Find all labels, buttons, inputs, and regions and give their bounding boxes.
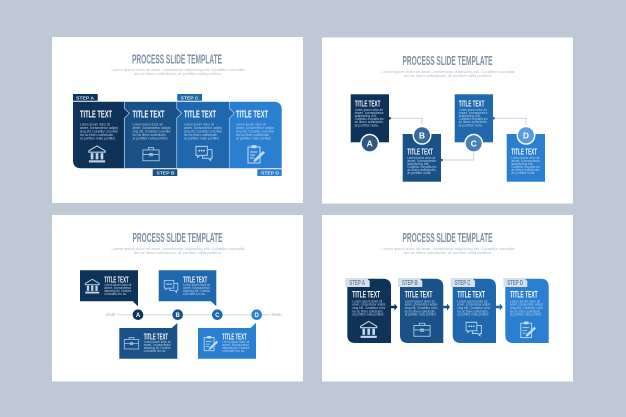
step card B: leo ac libero sollicitudin, (405, 309, 436, 313)
card C: adipiscing elit. (459, 114, 481, 118)
callout B: convallis leo ac (144, 349, 166, 353)
step card C: leo ac libero sollicitudin, (457, 309, 488, 313)
start label: START (106, 313, 116, 317)
callout D: amet, consectetur (222, 343, 250, 347)
marker D: D (255, 313, 260, 319)
step card B: amet, consectetur adipis (405, 303, 438, 307)
tag: step C: STEP C (455, 280, 470, 287)
card A (351, 94, 389, 142)
callout C: Lorem ipsum dolor sit (183, 283, 210, 287)
step A card: TITLE TEXT (80, 109, 112, 120)
badge A (360, 134, 379, 153)
subtitle: leo ac libero sollicitudin, at porttitor nulla porttitor. (404, 73, 492, 78)
step C card (177, 102, 234, 168)
step card B: cing elit. Curabitur conv (405, 306, 438, 310)
callout A: adipiscing elit. Curabitur (104, 289, 132, 293)
heading: PROCESS SLIDE TEMPLATE (132, 231, 222, 245)
step card B: at porttitor nulla porttitor. (405, 313, 437, 317)
step A card: cing elit. Curabitur convallis (80, 130, 118, 134)
card C (455, 94, 493, 142)
connector A to B (388, 117, 422, 125)
step card B: Lorem ipsum dolor sit (405, 299, 435, 303)
subtitle: Lorem ipsum dolor sit amet, consectetur adipiscing elit. Curabitur convallis (382, 246, 514, 251)
card A: amet, consectetur (355, 111, 385, 115)
callout A: TITLE TEXT (104, 275, 129, 284)
callout B: adipiscing elit. Curabitur (144, 346, 171, 350)
callout C: TITLE TEXT (183, 275, 207, 284)
step A card: Lorem ipsum dolor sit (80, 122, 110, 126)
subtitle: Lorem ipsum dolor sit amet, consectetur adipiscing elit. Curabitur convallis (112, 246, 244, 251)
heading: PROCESS SLIDE TEMPLATE (402, 54, 492, 68)
step C card: Lorem ipsum dolor sit (184, 122, 214, 126)
step card C: at porttitor nulla porttitor. (457, 313, 490, 317)
step card D: TITLE TEXT (510, 290, 538, 300)
step C card: at porttitor nulla porttitor. (184, 136, 220, 140)
card B: amet, consectetur (407, 159, 437, 163)
marker A: A (136, 313, 141, 319)
tag: step C (451, 278, 475, 287)
panel: chevron process slide (52, 37, 303, 203)
callout D: Lorem ipsum dolor sit (222, 340, 249, 344)
card C: at porttitor nulla. (459, 123, 483, 127)
card C: amet, consectetur (459, 111, 489, 115)
step card A: Lorem ipsum dolor sit (352, 299, 382, 303)
step C card: amet, consectetur adipis (184, 126, 222, 130)
step card A: cing elit. Curabitur conv (352, 306, 386, 310)
step C card: TITLE TEXT (184, 109, 216, 120)
step card B: TITLE TEXT (405, 290, 433, 300)
callout C: amet, consectetur (183, 286, 211, 290)
card D: ac libero sollicitudin, (511, 168, 540, 172)
card B: at porttitor nulla. (407, 171, 431, 175)
callout C: adipiscing elit. Curabitur (183, 289, 211, 293)
tag: step B (398, 278, 422, 287)
card C: Curabitur convallis leo (459, 117, 488, 121)
callout C (159, 270, 216, 306)
badge C: C (471, 138, 477, 148)
step card A: TITLE TEXT (352, 290, 380, 300)
callout A (80, 270, 138, 306)
panel: timeline slide (52, 215, 303, 382)
tag: step A (345, 278, 370, 287)
step B card: cing elit. Curabitur convallis (132, 130, 171, 134)
callout D: adipiscing elit. Curabitur (222, 346, 250, 350)
finish label: FINISH (272, 313, 282, 317)
subtitle: Lorem ipsum dolor sit amet, consectetur adipiscing elit. Curabitur convallis (112, 67, 244, 72)
card A: at porttitor nulla. (355, 123, 379, 127)
card D: amet, consectetur (511, 159, 541, 163)
card A: adipiscing elit. (355, 114, 377, 118)
step C card: leo ac libero sollicitudin, (184, 133, 218, 137)
card B: ac libero sollicitudin, (407, 168, 436, 172)
step D card: amet, consectetur adipis (236, 126, 274, 130)
step card A: leo ac libero sollicitudin, (352, 309, 383, 313)
heading: PROCESS SLIDE TEMPLATE (132, 52, 222, 66)
marker C (212, 309, 223, 320)
badge B: B (419, 130, 425, 140)
card B (403, 134, 441, 182)
subtitle: leo ac libero sollicitudin, at porttitor nulla porttitor. (404, 250, 492, 255)
panel: staggered cards slide (322, 38, 573, 204)
callout B: amet, consectetur (144, 343, 172, 347)
tag: step A (73, 94, 98, 101)
subtitle: leo ac libero sollicitudin, at porttitor nulla porttitor. (134, 250, 222, 255)
step D card: TITLE TEXT (236, 109, 268, 120)
badge D (516, 126, 536, 145)
arrow A to B (391, 304, 398, 310)
callout C: convallis leo ac (183, 292, 205, 296)
arrow C to D (496, 304, 503, 310)
subtitle: Lorem ipsum dolor sit amet, consectetur adipiscing elit. Curabitur convallis (382, 69, 514, 74)
heading: PROCESS SLIDE TEMPLATE (402, 231, 492, 245)
tag: step C: STEP C (180, 95, 199, 100)
marker A (133, 309, 143, 320)
step A card: amet, consectetur adipis (80, 126, 118, 130)
step B card (124, 102, 182, 168)
tag: step C (177, 94, 202, 101)
callout A: convallis leo ac (104, 292, 127, 296)
step card A (347, 279, 391, 343)
card A: Lorem ipsum dolor sit (355, 108, 383, 112)
tag: step B: STEP B (402, 280, 418, 287)
step card D: Lorem ipsum dolor sit (510, 299, 540, 303)
tag: step B: STEP B (156, 171, 175, 176)
card D: at porttitor nulla. (511, 171, 535, 175)
step card C: TITLE TEXT (457, 290, 485, 300)
callout A: amet, consectetur (104, 286, 132, 290)
step card C: cing elit. Curabitur conv (457, 306, 491, 310)
step card C (453, 279, 496, 343)
card B: adipiscing elit. (407, 162, 429, 166)
step A card: at porttitor nulla porttitor. (80, 136, 116, 140)
tag: step D: STEP D (507, 280, 523, 287)
marker C: C (215, 313, 220, 319)
step B card: Lorem ipsum dolor sit (132, 122, 163, 126)
step B card: at porttitor nulla porttitor. (132, 136, 169, 140)
step D card: Lorem ipsum dolor sit (236, 122, 266, 126)
step C card: cing elit. Curabitur convallis (184, 130, 222, 134)
card C: ac libero sollicitudin, (459, 120, 488, 124)
tag: step A: STEP A (349, 280, 365, 287)
step card D: amet, consectetur adipis (510, 303, 543, 307)
tag: step A: STEP A (76, 95, 95, 100)
subtitle (112, 67, 244, 76)
card A: TITLE TEXT (355, 98, 381, 108)
step card D: at porttitor nulla porttitor. (510, 313, 542, 317)
card D: Curabitur convallis leo (511, 165, 541, 169)
step A card: leo ac libero sollicitudin, (80, 133, 114, 137)
callout D: convallis leo ac (222, 349, 245, 353)
tag: step B (153, 169, 177, 176)
callout B (119, 323, 177, 359)
step card A: amet, consectetur adipis (352, 303, 386, 307)
step card A: at porttitor nulla porttitor. (352, 313, 385, 317)
badge C (464, 134, 483, 153)
step card C: Lorem ipsum dolor sit (457, 299, 487, 303)
connector B to C (440, 153, 474, 161)
step card C: amet, consectetur adipis (457, 303, 491, 307)
card B: Lorem ipsum dolor sit (407, 156, 435, 160)
marker B (172, 309, 183, 320)
step card D (505, 279, 549, 343)
badge D: D (523, 130, 529, 140)
tag: step D: STEP D (261, 171, 280, 176)
step B card: amet, consectetur adipis (132, 126, 171, 130)
card C: TITLE TEXT (459, 98, 485, 108)
card B: Curabitur convallis leo (407, 165, 437, 169)
badge B (412, 126, 432, 145)
step D card (229, 102, 282, 168)
step D card: cing elit. Curabitur convallis (236, 130, 274, 134)
subtitle (382, 69, 514, 78)
step card D: cing elit. Curabitur conv (510, 306, 543, 310)
marker D (251, 309, 262, 320)
badge A: A (367, 138, 373, 148)
step card B (400, 279, 443, 343)
marker B: B (176, 313, 181, 319)
step card D: leo ac libero sollicitudin, (510, 309, 541, 313)
callout B: TITLE TEXT (144, 332, 168, 341)
timeline line (117, 314, 271, 316)
subtitle (382, 246, 514, 255)
subtitle (112, 246, 244, 255)
card B: TITLE TEXT (407, 147, 433, 157)
card D: adipiscing elit. (511, 162, 533, 166)
callout D (198, 323, 256, 359)
card D: TITLE TEXT (511, 147, 537, 157)
card D (507, 134, 545, 182)
tag: step D (503, 278, 527, 287)
callout B: Lorem ipsum dolor sit (144, 340, 171, 344)
subtitle: leo ac libero sollicitudin, at porttitor nulla porttitor. (134, 71, 222, 76)
step B card: TITLE TEXT (132, 109, 164, 120)
connector C to D (492, 117, 526, 125)
card C: Lorem ipsum dolor sit (459, 108, 487, 112)
card A: Curabitur convallis leo (355, 117, 384, 121)
step D card: at porttitor nulla porttitor. (236, 136, 272, 140)
panel: rounded step cards slide (322, 215, 573, 382)
card A: ac libero sollicitudin, (355, 120, 384, 124)
callout D: TITLE TEXT (222, 332, 247, 341)
arrow B to C (443, 304, 450, 310)
card D: Lorem ipsum dolor sit (511, 156, 539, 160)
tag: step D (257, 169, 282, 176)
callout A: Lorem ipsum dolor sit (104, 283, 131, 287)
step A card (73, 102, 129, 168)
step B card: leo ac libero sollicitudin, (132, 133, 167, 137)
step D card: leo ac libero sollicitudin, (236, 133, 270, 137)
